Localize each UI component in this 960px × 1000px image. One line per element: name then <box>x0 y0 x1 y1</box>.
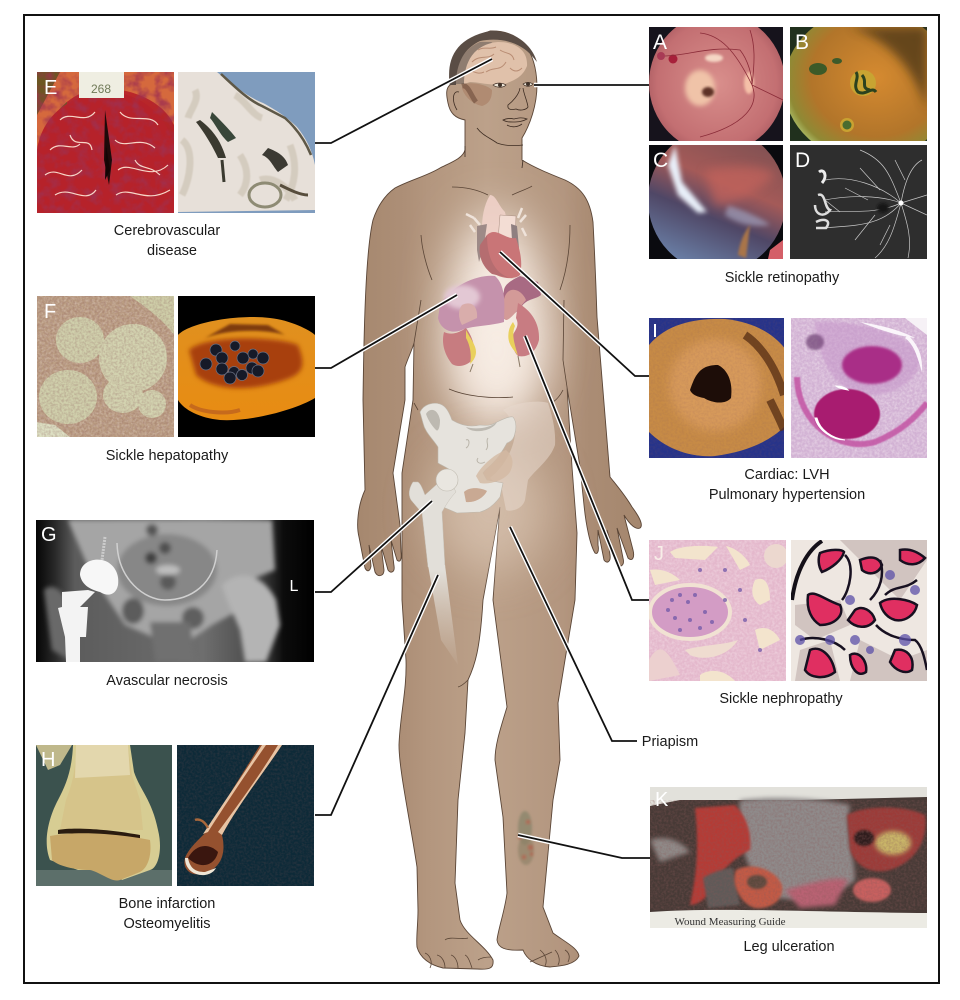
panel: gallstones <box>178 296 315 437</box>
skull band <box>455 42 492 84</box>
kidneys <box>443 303 539 372</box>
panel: silver stain <box>791 540 927 681</box>
panel: E brain surface: 268 <box>91 82 111 96</box>
panel: E brain surface: E <box>44 77 57 99</box>
panel: G pelvis x-ray: L <box>290 578 299 595</box>
caption: nephropathy: Sickle nephropathy <box>719 691 843 707</box>
panel: E brain surface <box>37 72 174 213</box>
caption: cerebrovascular: Cerebrovascular <box>114 223 220 239</box>
connector: leg ulcer <box>518 835 650 858</box>
connector: brain <box>315 59 492 143</box>
panel: B retina: B <box>795 31 809 54</box>
panel: G pelvis x-ray <box>36 520 314 662</box>
face features <box>453 82 533 168</box>
toes <box>425 938 569 968</box>
connector: priapism <box>510 527 637 741</box>
human body illustration <box>358 31 641 969</box>
panel: K leg ulcer <box>650 787 927 928</box>
panel: B retina <box>790 27 927 141</box>
panel: J kidney histology: J <box>654 543 664 565</box>
panel: brain section <box>178 72 315 213</box>
panel: H bone infarction: H <box>41 749 55 771</box>
panel: J kidney histology <box>649 540 788 681</box>
panel: F liver histology: F <box>44 301 56 323</box>
connector: heart <box>500 252 649 376</box>
hair <box>449 31 537 85</box>
panel: D fluorescein: D <box>795 149 810 172</box>
panel: D fluorescein <box>790 145 927 259</box>
liver, stomach, spleen <box>438 276 541 332</box>
leg ulcer <box>518 811 534 865</box>
caption: cardiac: Cardiac: LVH <box>744 467 830 483</box>
torso contours <box>414 186 570 687</box>
caption: bone infarction: Osteomyelitis <box>123 916 211 932</box>
panel: C retina: C <box>653 149 668 172</box>
caption: cerebrovascular: disease <box>147 243 197 259</box>
panel: K leg ulcer: Wound Measuring Guide <box>675 916 786 928</box>
panel: I heart section <box>649 318 786 458</box>
connector: eye <box>534 83 649 87</box>
connector: femur <box>315 501 432 592</box>
body silhouette <box>358 31 641 969</box>
panel: osteomyelitis bone <box>177 745 314 886</box>
panel: K leg ulcer: K <box>655 789 669 811</box>
pelvis translucent side <box>490 402 555 511</box>
caption: retinopathy: Sickle retinopathy <box>725 270 840 286</box>
torso highlight <box>432 215 548 572</box>
connector: kidney <box>525 336 649 600</box>
caption: cardiac: Pulmonary hypertension <box>709 487 865 503</box>
label: priapism: Priapism <box>642 734 698 750</box>
pelvis and femur bones <box>409 403 516 665</box>
connector: liver <box>315 295 457 368</box>
panel: A retina: A <box>653 31 667 54</box>
panel: H bone infarction <box>36 745 172 886</box>
panel: A retina <box>649 27 783 141</box>
caption: hepatopathy: Sickle hepatopathy <box>106 448 229 464</box>
panel: G pelvis x-ray: G <box>41 524 57 546</box>
panel: pulmonary histology <box>791 318 927 458</box>
panel: C retina <box>649 145 783 259</box>
panel: F liver histology <box>37 296 174 437</box>
caption: avascular necrosis: Avascular necrosis <box>106 673 228 689</box>
caption: bone infarction: Bone infarction <box>119 896 215 912</box>
caption: leg ulceration: Leg ulceration <box>743 939 835 955</box>
connector: bone <box>315 575 438 815</box>
brain <box>462 42 527 106</box>
heart <box>466 195 526 279</box>
